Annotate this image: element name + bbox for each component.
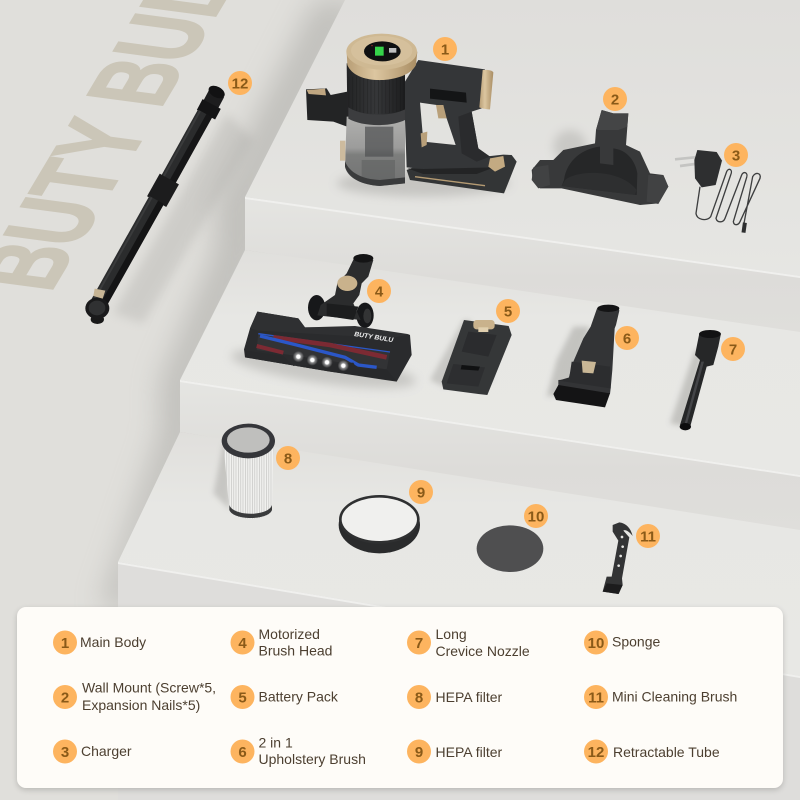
item 9: round HEPA filter (339, 495, 420, 553)
dust bin (345, 117, 405, 186)
badge 12: 12 (232, 76, 248, 92)
tier 1 top (245, 0, 800, 276)
legend 11: mini cleaning brush: Mini Cleaning Brush (612, 688, 737, 704)
badge 9 (409, 480, 433, 504)
legend 6: upholstery brush: Upholstery Brush (258, 751, 366, 767)
legend 10: sponge: 10 (588, 635, 604, 652)
badge 1 (433, 37, 457, 61)
item 11: mini cleaning brush (603, 522, 633, 594)
legend 1: main body: 1 (61, 635, 69, 652)
item 12: retractable tube (85, 83, 253, 324)
gold pivot (337, 276, 357, 291)
brand mark: BUTY BULU (354, 331, 394, 344)
legend 4: motorized brush head: Brush Head (258, 642, 332, 658)
badge 4: 4 (375, 284, 384, 300)
neck (317, 258, 373, 320)
legend 12: retractable tube (584, 740, 720, 764)
legend 12: retractable tube: Retractable Tube (613, 744, 720, 760)
legend 7: long crevice nozzle: Long (436, 626, 467, 642)
legend 2: wall mount: 2 (61, 690, 69, 706)
item 2: wall mount (532, 110, 668, 205)
tier 1 face (245, 197, 800, 332)
badge 12 (228, 71, 252, 95)
badge 9: 9 (417, 484, 425, 502)
gold cap (347, 52, 417, 80)
legend 3: charger: Charger (81, 743, 132, 759)
badge 2 (603, 87, 627, 111)
callout badges on products (228, 37, 748, 548)
legend 3: charger (53, 740, 132, 764)
badge 8: 8 (284, 450, 292, 468)
legend 7: long crevice nozzle (407, 626, 530, 659)
item 3: charger (675, 150, 760, 233)
wheels (308, 295, 325, 320)
legend 7: long crevice nozzle: Crevice Nozzle (436, 643, 530, 659)
legend 2: wall mount: Wall Mount (Screw*5, (82, 680, 216, 696)
legend 12: retractable tube: 12 (588, 744, 604, 761)
legend 5: battery pack: 5 (238, 690, 247, 706)
legend 4: motorized brush head: Motorized (258, 626, 320, 642)
LEDs (293, 351, 304, 362)
legend 2: wall mount (53, 680, 216, 713)
black cylinder (347, 63, 405, 118)
item 7: long crevice nozzle (670, 330, 721, 430)
legend 4: motorized brush head: 4 (238, 635, 247, 652)
front bumper (245, 351, 396, 381)
gold tube end (479, 70, 493, 109)
battery base (407, 155, 517, 193)
body (244, 312, 412, 382)
nozzle (306, 88, 352, 128)
legend 8: HEPA filter: 8 (415, 690, 423, 706)
legend 4: motorized brush head (230, 626, 332, 658)
tier 3 face (118, 562, 800, 800)
legend 9: HEPA filter: 9 (415, 744, 423, 761)
legend 11: mini cleaning brush (584, 685, 737, 709)
badge 3 (724, 143, 748, 167)
badge 6 (615, 326, 639, 350)
badge 10 (524, 504, 548, 528)
badge 5: 5 (504, 304, 512, 320)
legend 10: sponge: Sponge (612, 634, 660, 650)
badge 1: 1 (441, 42, 449, 58)
badge 6: 6 (623, 330, 631, 348)
tier 3 top (118, 432, 800, 676)
legend 6: upholstery brush: 2 in 1 (258, 734, 293, 750)
legend 5: battery pack: Battery Pack (258, 688, 339, 704)
legend 1: main body: Main Body (80, 634, 146, 650)
badge 3: 3 (732, 148, 740, 164)
handle, tube and strut (405, 60, 494, 169)
badge 2: 2 (611, 92, 619, 108)
panel: parts legend (17, 607, 783, 790)
legend 2: wall mount: Expansion Nails*5) (82, 697, 200, 713)
left slab shadow (100, 0, 365, 607)
item 1: main vacuum body (306, 34, 517, 197)
legend 1: main body (53, 630, 146, 654)
legend 9: HEPA filter: HEPA filter (436, 744, 502, 760)
item 4: motorized brush head (229, 254, 418, 396)
item 8: cylindrical HEPA filter (213, 424, 275, 519)
legend 10: sponge (584, 630, 660, 654)
badge 10: 10 (528, 508, 544, 526)
badge 7: 7 (729, 342, 737, 358)
legend 8: HEPA filter (407, 685, 502, 709)
legend 6: upholstery brush (230, 734, 366, 767)
trigger and latch (436, 105, 447, 118)
item 6: upholstery brush (547, 305, 619, 407)
brush window (257, 333, 390, 369)
legend 5: battery pack (230, 685, 339, 709)
badge 4 (367, 279, 391, 303)
legend 7: long crevice nozzle: 7 (415, 635, 423, 652)
legend 9: HEPA filter (407, 740, 502, 764)
badge 11 (636, 524, 660, 548)
tier 2 face (180, 380, 800, 530)
badge 8 (276, 446, 300, 470)
legend 8: HEPA filter: HEPA filter (436, 689, 502, 705)
badge 7 (721, 337, 745, 361)
digital display (364, 41, 401, 61)
item 10: sponge (477, 525, 543, 572)
item 5: battery pack (430, 320, 512, 395)
tier 2 top (180, 250, 800, 475)
badge 5 (496, 299, 520, 323)
legend 6: upholstery brush: 6 (238, 744, 247, 761)
legend 3: charger: 3 (61, 744, 69, 761)
vent (430, 89, 467, 103)
legend 11: mini cleaning brush: 11 (588, 690, 604, 706)
badge 11: 11 (640, 528, 656, 546)
